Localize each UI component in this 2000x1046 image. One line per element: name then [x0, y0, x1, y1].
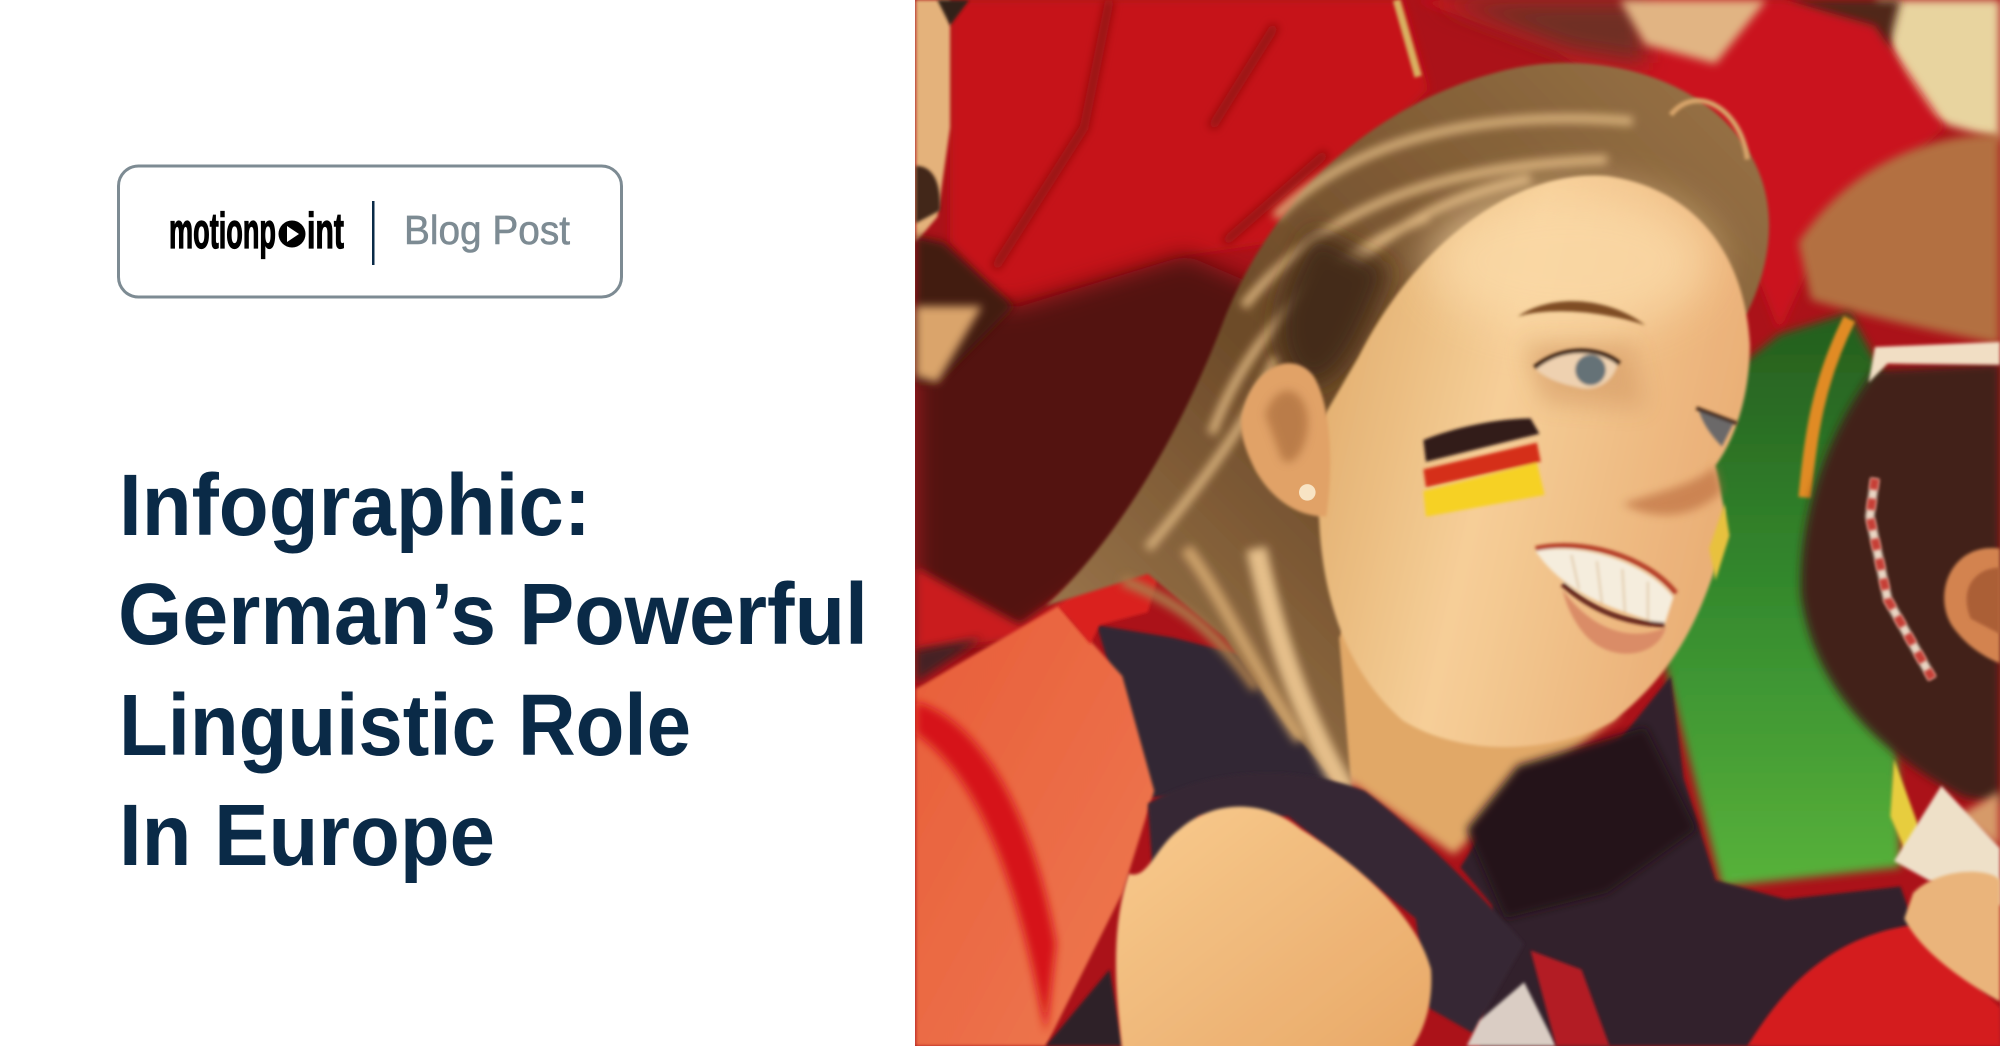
title line 4: In Europe	[119, 787, 495, 884]
label: Blog Post: Blog Post	[404, 207, 571, 253]
background crowd	[914, 0, 2000, 1046]
arm, upper right	[1798, 134, 2000, 344]
neck	[1316, 630, 1624, 860]
right cheek paint	[1709, 504, 1730, 580]
badge outline	[118, 166, 622, 297]
warm light overlay	[914, 0, 2000, 1046]
second hand, lower right	[1904, 872, 2000, 1001]
logo: motionpoint: motionp	[169, 203, 276, 259]
flag fold held in fist	[1148, 773, 1524, 1033]
title line 1: Infographic:	[119, 457, 591, 554]
boy, lower right	[1801, 342, 2000, 906]
cheek and forehead highlight	[1428, 191, 1709, 332]
logo: motionpoint: int	[307, 203, 344, 259]
title line 3: Linguistic Role	[119, 677, 691, 774]
title line 2: German’s Powerful	[118, 566, 868, 663]
white and red lower shirt	[1046, 925, 2000, 1046]
face	[1314, 175, 1750, 747]
ear	[1241, 363, 1330, 517]
photo: smiling German football fan with flag face paint	[915, 0, 2000, 1046]
right collar	[1460, 676, 1939, 1046]
fist, foreground	[1116, 807, 1431, 1046]
eyebrow	[1518, 301, 1645, 325]
vertical divider	[372, 201, 374, 265]
eyes	[1524, 344, 1737, 446]
orange jacket, left	[916, 568, 1161, 1046]
nose shadow	[1622, 466, 1722, 515]
title	[118, 457, 868, 884]
green shirt and flag	[1658, 313, 1920, 887]
dark flag collar behind the neck	[1097, 625, 1339, 797]
smile with teeth	[1536, 546, 1676, 654]
blonde hair	[1046, 63, 1769, 797]
brand badge: MotionPoint Blog Post	[117, 164, 623, 298]
flag face paint	[1423, 418, 1545, 517]
